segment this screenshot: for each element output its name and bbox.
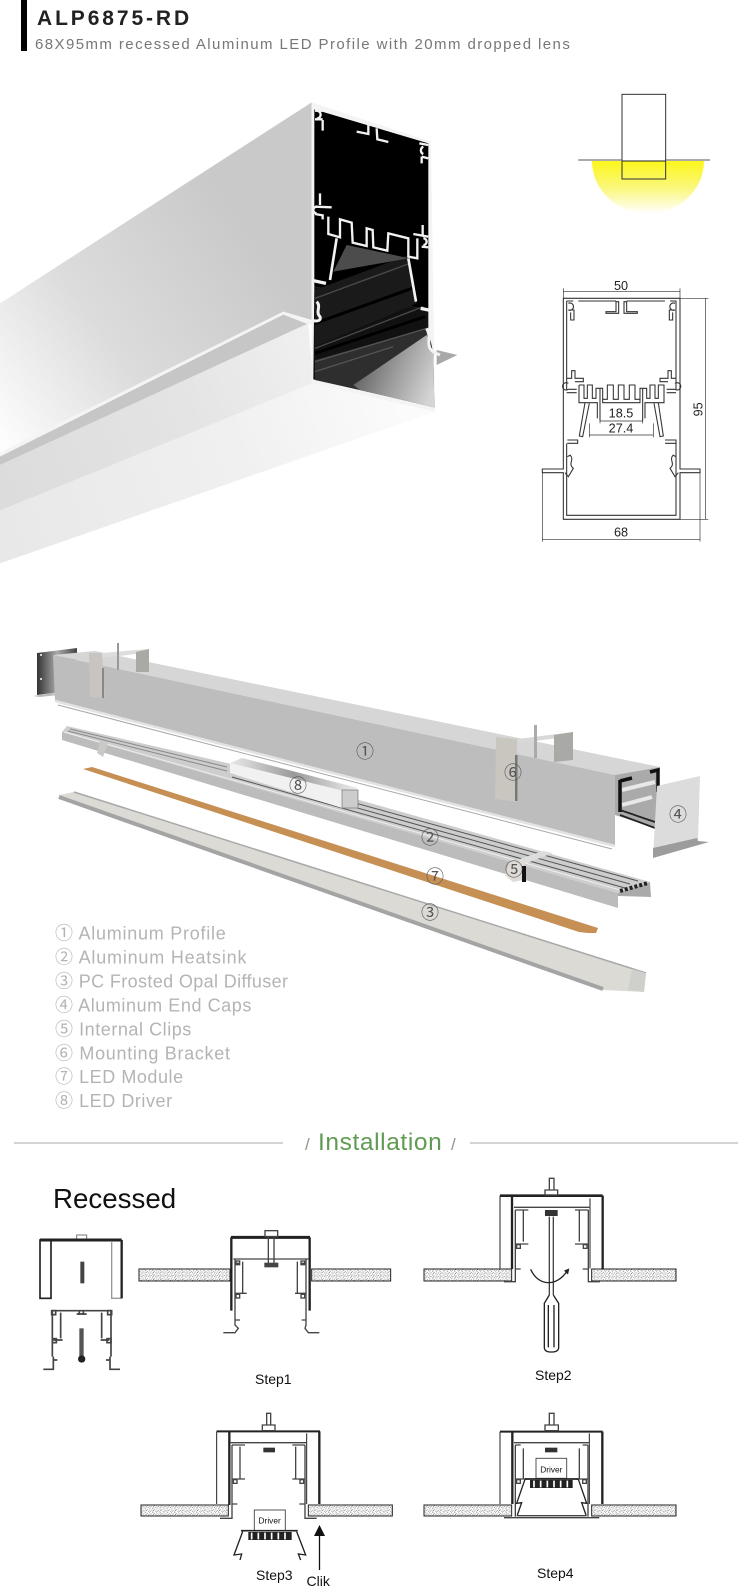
click label: Clik	[306, 1573, 331, 1589]
part number callouts: ②	[421, 828, 439, 848]
end cap, right	[653, 776, 709, 858]
parts legend: ⑦ LED Module	[55, 1067, 184, 1087]
exploded view: LED profile assembly	[33, 643, 709, 992]
PC diffuser	[59, 792, 646, 992]
dimension values: 95	[691, 402, 705, 416]
cross-section dimension drawing	[542, 279, 708, 542]
part number callouts: ①	[356, 742, 374, 762]
parts legend: ④ Aluminum End Caps	[55, 996, 252, 1016]
mounting bracket, right	[495, 725, 573, 802]
subtitle: 68X95mm recessed Aluminum LED Profile with 20mm dropped lens	[35, 36, 571, 53]
section heading: installation: /	[451, 1135, 456, 1154]
aluminum heatsink	[62, 726, 651, 908]
dimension values: 68	[614, 526, 628, 540]
diagram: step 4	[424, 1413, 676, 1518]
part number callouts	[289, 742, 687, 923]
section heading: installation	[14, 1129, 738, 1156]
parts legend: ② Aluminum Heatsink	[55, 948, 247, 968]
step 3 label: Step3	[256, 1567, 293, 1583]
diagram: bracket and profile parts	[40, 1235, 122, 1369]
diagram: step 2	[424, 1178, 676, 1352]
parts legend: ③ PC Frosted Opal Diffuser	[55, 972, 288, 992]
diagram: step 1	[139, 1231, 391, 1333]
LED driver	[230, 758, 358, 808]
parts legend	[55, 924, 288, 1111]
driver with heatsink	[517, 1458, 587, 1515]
dimension lines	[542, 288, 708, 542]
mounting bracket, left	[89, 643, 149, 698]
dimension values: 18.5	[609, 407, 633, 421]
step 1 label: Step1	[255, 1371, 292, 1387]
profile outline	[542, 298, 700, 519]
LED module	[83, 767, 598, 933]
driver with heatsink: Driver	[540, 1464, 563, 1474]
arrow: click direction	[314, 1525, 325, 1570]
dimension values: 50	[614, 279, 628, 293]
light distribution diagram	[578, 94, 710, 214]
step 4 label: Step4	[537, 1565, 574, 1581]
part number callouts: ⑥	[504, 763, 522, 783]
screwdriver	[544, 1295, 559, 1352]
internal clip, right	[505, 851, 553, 882]
end cap, left	[33, 648, 77, 697]
part number callouts: ③	[421, 903, 439, 923]
title: ALP6875-RD	[37, 7, 192, 30]
heading: recessed: Recessed	[53, 1183, 176, 1214]
parts legend: ⑥ Mounting Bracket	[55, 1044, 231, 1064]
dimension values: 27.4	[609, 421, 633, 435]
part number callouts: ④	[669, 805, 687, 825]
title accent bar	[21, 0, 27, 51]
product render: aluminum profile	[0, 102, 457, 563]
parts legend: ① Aluminum Profile	[55, 924, 227, 944]
parts legend: ⑤ Internal Clips	[55, 1020, 192, 1040]
step 2 label: Step2	[535, 1367, 572, 1383]
part number callouts: ⑧	[289, 776, 307, 796]
driver with heatsink: Driver	[259, 1516, 281, 1526]
parts legend: ⑧ LED Driver	[55, 1091, 173, 1111]
diagram: step 3	[141, 1413, 392, 1560]
driver with heatsink	[234, 1510, 306, 1560]
part number callouts: ⑤	[505, 860, 523, 880]
internal clip, left	[97, 740, 108, 757]
section heading: installation: /	[305, 1135, 310, 1154]
rotation arrow	[531, 1269, 567, 1283]
section heading: installation: Installation	[318, 1129, 442, 1156]
dimension values	[609, 279, 705, 540]
aluminum profile	[53, 651, 660, 849]
part number callouts: ⑦	[426, 867, 444, 887]
